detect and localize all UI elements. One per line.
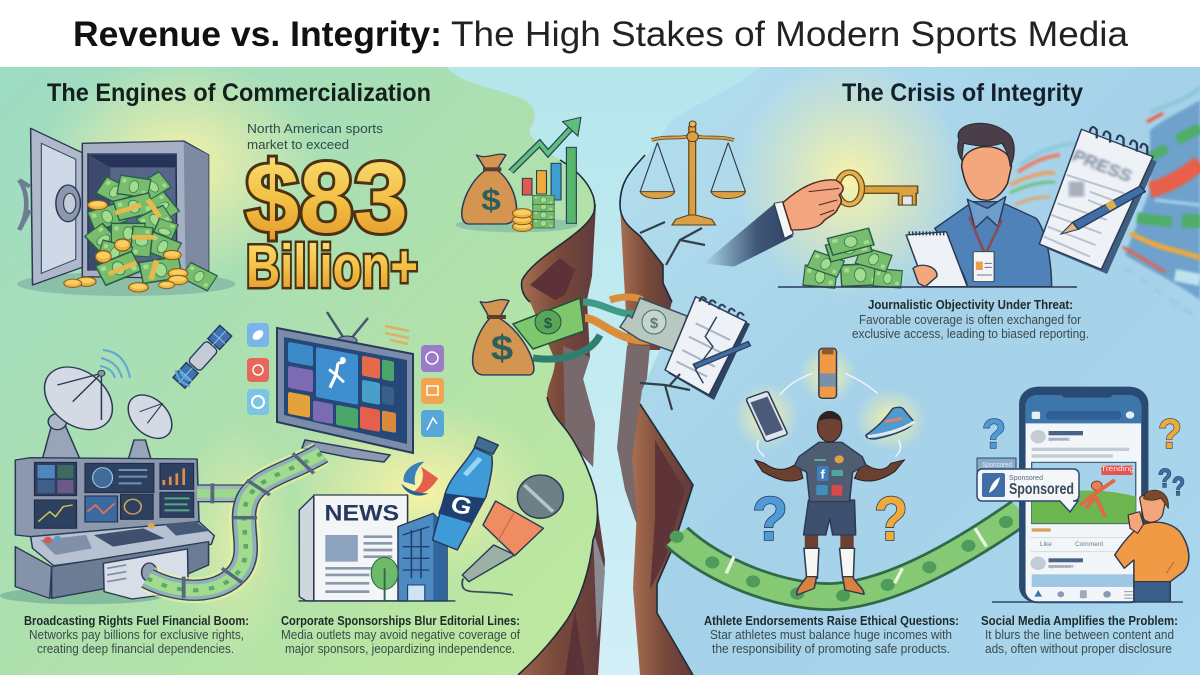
caption: social media: Social Media Amplifies the Problem: [981,614,1178,628]
icon: journalist [906,123,1052,287]
icon: money bag and growth chart [455,117,581,232]
icon: microphone [462,475,563,595]
icon: confused man [1115,490,1189,602]
panel: left green background [0,67,597,675]
icon: newspaper: NEWS [325,502,399,526]
left rock face [505,204,605,675]
icon: question marks around phone: ? [1158,410,1182,457]
icon: newspaper [299,495,408,601]
stat: North American sports market [245,121,418,300]
glows behind illustrations [40,55,965,660]
caption: athlete endorsements: Athlete Endorsements Raise Ethical Questions: [704,614,959,628]
icon: television [277,312,413,462]
panel: right blue background [620,67,1200,675]
title bar: The High Stakes of Modern Sports Media [451,15,1129,54]
icon: satellite [173,325,232,388]
title bar: Revenue vs. Integrity: [73,15,442,54]
icon: question marks around phone: ? [1172,471,1185,501]
base line under phone [992,601,1183,603]
text: phone post labels: Comment [1075,541,1103,548]
icon: press notebook and pen [1039,127,1157,274]
caption: journalistic objectivity: Journalistic Objectivity Under Threat: [868,298,1073,312]
caption: journalistic objectivity: Favorable coverage is often exchanged for [859,313,1081,327]
caption: journalistic objectivity [852,298,1089,341]
icon: money bag and growth chart: $ [481,182,501,216]
callout: sponsored tag: Sponsored [1009,481,1074,498]
text: phone post labels [1040,437,1134,569]
text: phone post labels: Sponsored [1048,564,1070,569]
text: phone post labels: Like [1040,541,1052,548]
icon: athlete: f [820,467,826,481]
heading: right: The Crisis of Integrity [842,79,1083,107]
caption: social media: ads, often without proper disclosure [985,642,1172,656]
heading: left: The Engines of Commercialization [47,79,431,107]
icon: press notebook and pen: PRESS [1069,146,1136,186]
icon: money ribbon linking bag to torn notebook: $ [544,315,553,332]
caption: athlete endorsements: Star athletes must balance huge incomes with [710,628,952,642]
text: phone post labels: Sponsored [1048,437,1070,442]
caption: social media: It blurs the line between content and [985,628,1174,642]
caption: journalistic objectivity: exclusive access, leading to biased reporting. [852,327,1089,341]
icon: corporate building and tree [299,513,455,601]
icon: money ribbon linking bag to torn notebook: $ [650,315,659,332]
icon: signal waves [100,350,192,386]
callout: sponsored tag: Sponsored [1009,473,1043,482]
icon: cracks in cliff [640,222,705,410]
icon: question marks around athlete: ? [874,485,908,554]
right rock face [617,205,693,675]
caption: broadcasting rights: Broadcasting Rights Fuel Financial Boom: [24,614,249,628]
icon: hand offering a key [703,172,918,267]
caption: social media [981,614,1178,656]
icon: center money bag [473,300,534,375]
icon: sponsor logo swirl [401,462,438,496]
callout: sponsored tag: Sponsored [982,460,1012,469]
icon: cash stack [803,228,902,288]
caption: corporate sponsorships: Media outlets may avoid negative coverage of [281,628,520,642]
text: phone post labels: Trending [1101,464,1134,473]
icon: smartphone feed [1019,387,1148,603]
icon: open safe with cash [17,128,235,296]
icon: scales of justice [640,121,745,225]
ground line [778,286,1077,288]
icon: question marks around phone [982,410,1185,501]
caption: athlete endorsements [704,614,959,656]
icon: money tightrope bridge [677,512,1021,597]
icon: center money bag: $ [491,328,513,367]
icon: sports drink bottle: G [447,491,475,521]
icon: question marks around athlete: ? [752,485,788,554]
icon: app tiles around TV [247,323,444,437]
caption: broadcasting rights: creating deep financial dependencies. [37,642,234,656]
icon: question marks around phone: ? [1158,463,1172,493]
stat: North American sports market: Billion+ [246,233,418,300]
stat: North American sports market: North American sports [247,121,384,136]
stat: North American sports market: $83 [245,142,408,254]
icon: torn notebook and pen [665,297,750,400]
icon: money ribbon linking bag to torn notebook [513,297,687,359]
icon: sports drink bottle [432,437,498,550]
callout: sponsored tag [977,458,1079,512]
caption: corporate sponsorships: major sponsors, jeopardizing independence. [285,642,515,656]
icon: athlete [755,411,904,595]
caption: athlete endorsements: the responsibility of promoting safe products. [712,642,950,656]
icon: money pipeline [147,453,321,598]
icon: broadcast control console [0,458,214,604]
icon: data streams [1010,88,1200,318]
caption: corporate sponsorships: Corporate Sponsorships Blur Editorial Lines: [281,614,520,628]
caption: corporate sponsorships [281,614,520,656]
icon: satellite dishes [31,355,181,460]
caption: broadcasting rights: Networks pay billions for exclusive rights, [29,628,244,642]
icon: endorsed products orbit [734,347,927,457]
title bar [0,0,1200,67]
cliff edge outlines [518,155,693,675]
icon: question marks around athlete [752,485,908,554]
caption: broadcasting rights [24,614,249,656]
stat: North American sports market: market to exceed [247,137,349,152]
icon: question marks around phone: ? [982,410,1006,457]
